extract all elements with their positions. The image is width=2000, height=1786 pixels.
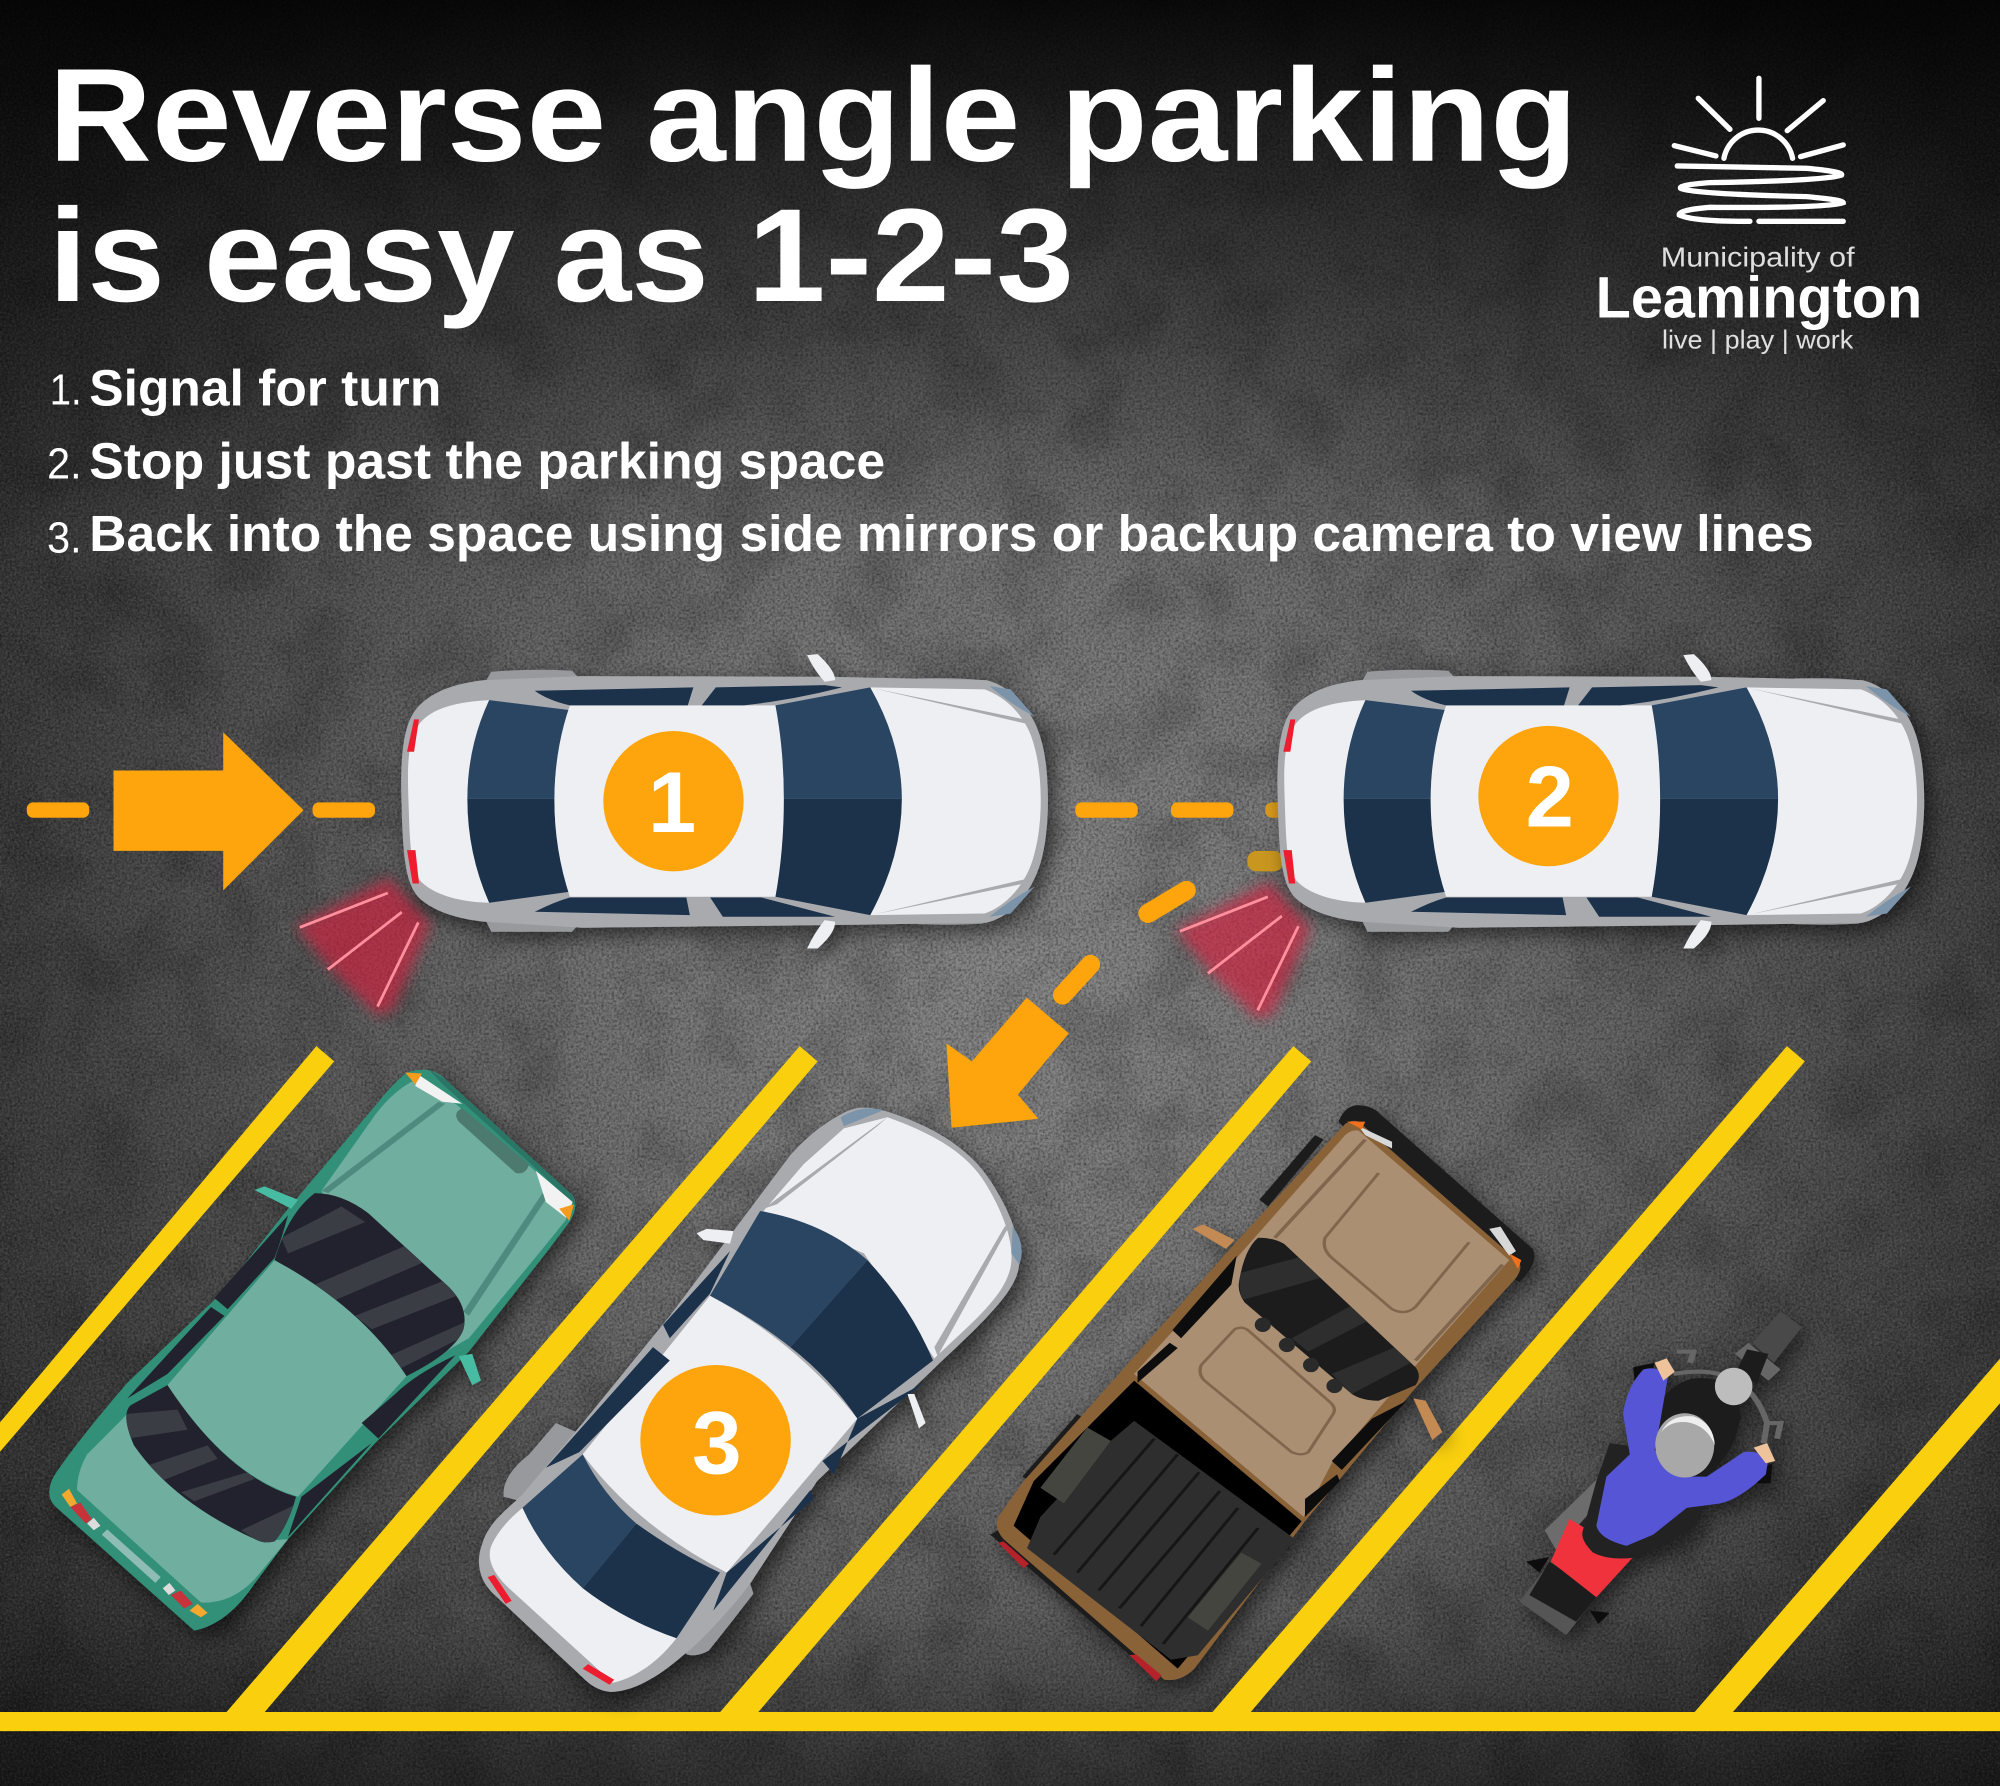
arrow: forward entering — [114, 732, 304, 890]
hands — [1655, 1358, 1775, 1463]
rear wheel — [1519, 1561, 1596, 1635]
body outline — [401, 676, 1048, 928]
seat — [1551, 1519, 1633, 1597]
wheel arches — [503, 1423, 753, 1655]
rear window dark half — [583, 1524, 720, 1638]
grips — [1633, 1363, 1772, 1483]
body outline — [479, 1108, 1020, 1692]
arrow: reverse into space — [946, 998, 1069, 1128]
bed floor — [1027, 1421, 1295, 1660]
mirrors — [697, 1229, 926, 1428]
step 1: Signal for turn — [89, 360, 441, 417]
headlight — [1715, 1368, 1752, 1405]
hood — [321, 1081, 569, 1376]
yellow parking lines — [0, 1046, 2000, 1731]
hood panel — [1324, 1173, 1469, 1312]
mirrors — [807, 654, 835, 948]
front bumper — [1338, 1105, 1534, 1282]
tail lights — [488, 1575, 614, 1685]
truck bed — [1014, 1381, 1302, 1669]
parked pickup truck — [990, 1105, 1534, 1682]
turn signal rays car 1 — [296, 878, 431, 1015]
body — [49, 1070, 575, 1631]
hood creases — [874, 688, 1028, 914]
rider torso and arms — [1596, 1368, 1768, 1546]
roof — [167, 1260, 407, 1497]
car 1: white sedan — [401, 654, 1048, 948]
hood creases — [321, 1102, 548, 1316]
logo text: Municipality of — [1661, 242, 1855, 273]
turn lamps — [405, 1073, 574, 1221]
exhaust — [1545, 1477, 1610, 1550]
rear lights — [62, 1489, 208, 1617]
side windows — [127, 1215, 455, 1537]
wheel arches — [486, 670, 1004, 932]
helmet — [1655, 1413, 1714, 1478]
car 3: white sedan reversed into space — [479, 1108, 1022, 1692]
seat base — [1582, 1443, 1700, 1558]
logo: Municipality of Leamington — [1596, 78, 1922, 354]
title — [48, 42, 1578, 330]
mirrors — [255, 1186, 481, 1385]
rear window — [126, 1385, 296, 1542]
rear window stripes — [124, 1410, 298, 1544]
roof panel — [1200, 1328, 1334, 1454]
turn lamps — [1347, 1122, 1521, 1269]
windshield stripes — [281, 1207, 469, 1369]
mirrors — [1192, 1224, 1442, 1440]
parked green car — [49, 1069, 576, 1631]
side windows — [546, 1251, 924, 1611]
headlights — [841, 1108, 1022, 1265]
steps list — [47, 360, 1814, 562]
roof — [554, 705, 784, 897]
windshield stripes — [1238, 1256, 1419, 1394]
side windows — [1138, 1256, 1407, 1517]
bed ribs — [1054, 1439, 1258, 1644]
icon: sun over waves — [1674, 78, 1843, 221]
roof — [583, 1296, 857, 1573]
rear deck — [408, 700, 489, 903]
number badge 3 — [640, 1365, 791, 1516]
step 2: 2. — [47, 440, 82, 488]
headlights — [415, 1075, 573, 1218]
step 2: Stop just past the parking space — [89, 432, 885, 489]
motorcycle with rider — [1519, 1311, 1802, 1635]
number plate — [102, 1529, 161, 1583]
front grille — [456, 1108, 529, 1173]
step 3: Back into the space using side mirrors or backup camera to view lines — [89, 505, 1814, 562]
windshield — [275, 1193, 465, 1376]
number badge 2 — [1478, 726, 1619, 866]
rear window — [467, 700, 570, 799]
number badge 1 — [603, 731, 744, 871]
headlights — [990, 686, 1034, 917]
turn signal rays car 2 — [1176, 882, 1311, 1019]
front edge — [429, 1069, 576, 1207]
fuel tank — [1650, 1378, 1740, 1486]
tail lights — [407, 719, 419, 883]
title: is easy as 1-2-3 — [48, 182, 1074, 330]
foot pegs — [1526, 1557, 1610, 1624]
tail lights — [998, 1541, 1162, 1681]
hood — [764, 1117, 1012, 1358]
rear deck — [77, 1414, 288, 1603]
rear fender — [1529, 1561, 1598, 1622]
front wheel — [1752, 1311, 1802, 1363]
logo: Municipality of Leamington: live | play | work — [1662, 326, 1854, 354]
windshield — [775, 687, 902, 799]
path: orange dashes — [27, 802, 1291, 995]
hood creases — [1275, 1140, 1503, 1361]
body — [997, 1121, 1520, 1680]
windshield dark half — [790, 1260, 933, 1419]
helmet highlight — [1661, 1416, 1715, 1445]
logo: Municipality of Leamington: Leamington — [1596, 266, 1922, 331]
handlebars — [1673, 1352, 1781, 1443]
fork — [1735, 1343, 1781, 1381]
windshield light half — [710, 1211, 867, 1347]
side windows — [535, 685, 842, 917]
rear deck — [490, 1508, 676, 1683]
number badge 1: 1 — [648, 754, 696, 851]
side steps — [990, 1135, 1324, 1682]
wheel wells — [1040, 1428, 1261, 1631]
hood — [870, 687, 1041, 915]
car 2: white sedan — [1277, 654, 1924, 948]
rear window light half — [522, 1454, 636, 1588]
step 3: 3. — [47, 514, 82, 562]
headlights — [1359, 1126, 1516, 1256]
number badge 3: 3 — [692, 1392, 742, 1492]
number badge 2: 2 — [1526, 749, 1574, 846]
roof marker lights — [1255, 1318, 1342, 1393]
windshield — [1239, 1238, 1419, 1401]
step 1: 1. — [50, 366, 82, 414]
cab and hood — [1134, 1130, 1509, 1517]
hood creases — [764, 1117, 1011, 1356]
title: Reverse angle parking — [48, 42, 1578, 190]
